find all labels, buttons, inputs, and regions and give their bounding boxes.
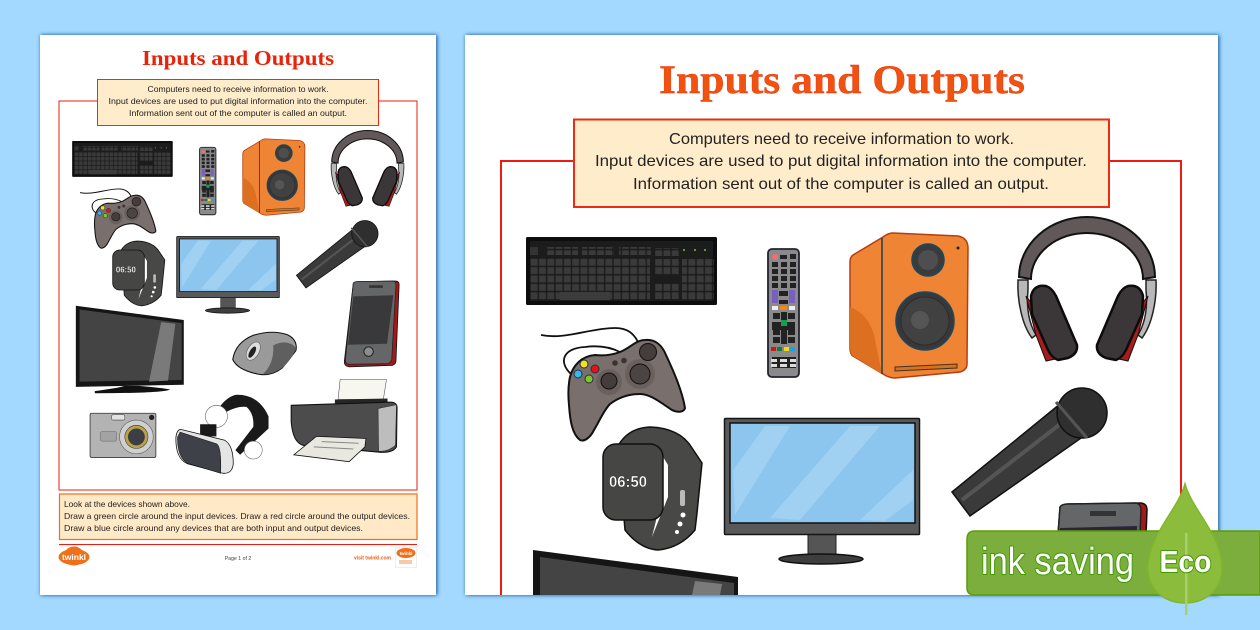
small device frame xyxy=(59,101,417,490)
large intro box: Computers need to receive information to work. xyxy=(669,131,1014,148)
small page title: Inputs and Outputs xyxy=(142,46,334,70)
small instructions box: Look at the devices shown above. xyxy=(64,500,190,509)
panel: small worksheet preview xyxy=(40,35,436,595)
large tv, cropped by page edge xyxy=(533,550,738,595)
large page sheet xyxy=(465,35,1218,595)
badge bar xyxy=(967,531,1260,595)
footer rule xyxy=(59,544,417,545)
large intro box: Information sent out of the computer is called an output. xyxy=(633,176,1049,193)
badge: ink saving eco xyxy=(967,484,1260,615)
large page title: Inputs and Outputs xyxy=(659,57,1025,102)
leaf label: Eco xyxy=(1160,544,1212,579)
large device frame xyxy=(501,161,1181,595)
icon: quality stamp xyxy=(396,548,416,568)
small intro box: Computers need to receive information to work. xyxy=(148,84,328,94)
footer website: visit twinkl.com xyxy=(354,556,392,562)
footer page number: Page 1 of 2 xyxy=(225,556,251,562)
icon: twinkl logo xyxy=(58,546,90,566)
small instructions box: Draw a green circle around the input devices. Draw a red circle around the output devices. xyxy=(64,512,410,521)
large intro box xyxy=(574,120,1109,207)
small device illustrations xyxy=(72,130,404,473)
large device illustrations xyxy=(526,217,1156,564)
panel: enlarged worksheet xyxy=(465,35,1218,595)
small page sheet xyxy=(40,35,436,595)
icon: twinkl logo: twinkl xyxy=(62,552,86,562)
icon: green leaf xyxy=(1148,484,1222,615)
icon: quality stamp: twinkl xyxy=(400,551,412,556)
small instructions box: Draw a blue circle around any devices that are both input and output devices. xyxy=(64,524,363,533)
large phone, hidden below badge xyxy=(1058,503,1147,535)
small intro box: Input devices are used to put digital information into the computer. xyxy=(108,96,368,106)
small intro box xyxy=(98,80,378,126)
badge label: ink saving xyxy=(981,541,1134,583)
small intro box: Information sent out of the computer is called an output. xyxy=(129,108,347,118)
large intro box: Input devices are used to put digital information into the computer. xyxy=(595,153,1087,170)
small instructions box xyxy=(60,494,417,540)
